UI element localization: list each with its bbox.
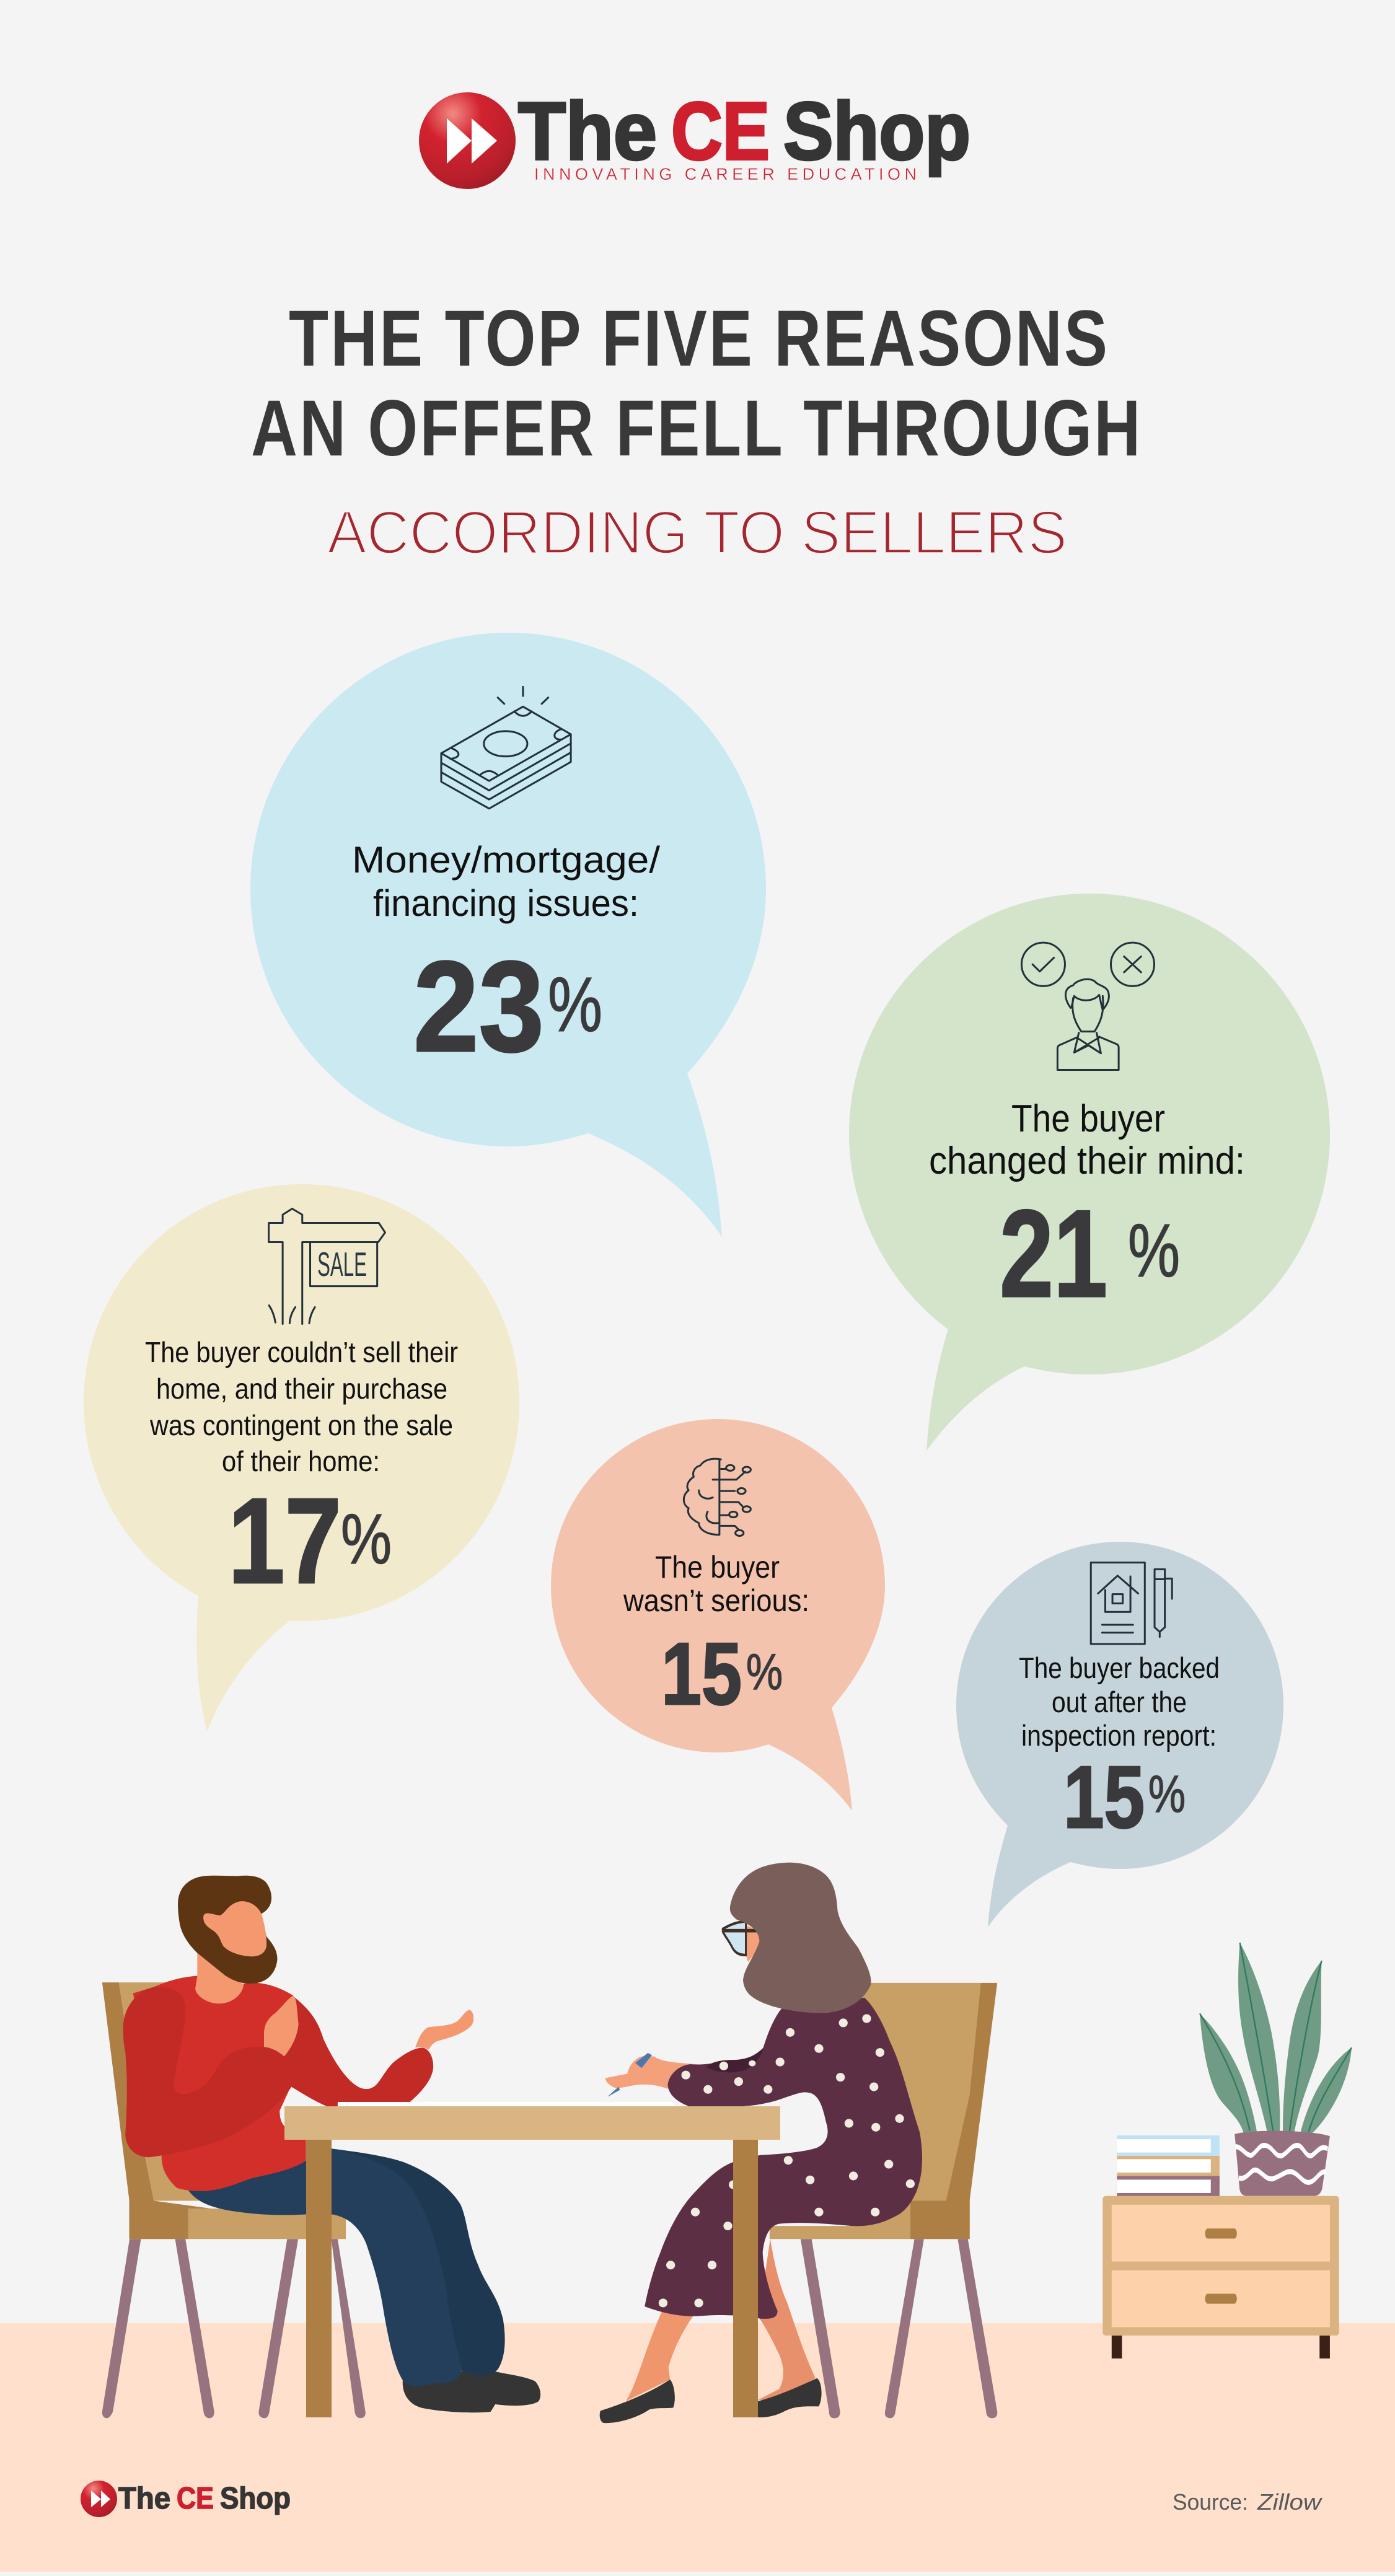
value 15%: % bbox=[1148, 1765, 1186, 1823]
man trousers bbox=[188, 2148, 505, 2386]
label: Money/mortgage/ bbox=[352, 839, 660, 881]
bubble shape bbox=[551, 1419, 885, 1811]
paper on table bbox=[338, 2102, 674, 2107]
woman legs bbox=[626, 2239, 816, 2401]
icon: stack of money bbox=[441, 687, 571, 809]
woman dress bbox=[645, 1998, 922, 2319]
icon: brain circuit bbox=[684, 1459, 750, 1536]
value 17%: 17 bbox=[228, 1473, 341, 1609]
chair left bbox=[102, 1982, 366, 2418]
man hair and beard bbox=[178, 1876, 277, 1984]
plant pot bbox=[1234, 2131, 1330, 2196]
label: of their home: bbox=[222, 1445, 380, 1477]
panel: money issues bubble bbox=[250, 633, 766, 1237]
label: home, and their purchase bbox=[156, 1373, 447, 1405]
label: inspection report: bbox=[1021, 1719, 1217, 1752]
icon: for sale sign bbox=[269, 1209, 385, 1324]
label: wasn’t serious: bbox=[623, 1583, 809, 1618]
footer logo wordmark: CE bbox=[177, 2482, 214, 2515]
panel: contingent sale bubble bbox=[84, 1184, 519, 1732]
woman face and glasses bbox=[723, 1922, 760, 1962]
bubble shape bbox=[250, 633, 766, 1237]
icon: inspection document and pen bbox=[1091, 1563, 1172, 1644]
label bbox=[1019, 1651, 1220, 1752]
footer logo wordmark: Shop bbox=[220, 2482, 291, 2515]
panel: changed mind bubble bbox=[849, 894, 1330, 1451]
footer logo wordmark: The bbox=[118, 2482, 170, 2515]
logo tagline: INNOVATING CAREER EDUCATION bbox=[534, 165, 917, 183]
title: THE TOP FIVE REASONS bbox=[289, 294, 1107, 382]
value 15%: 15 bbox=[1063, 1748, 1145, 1847]
woman seated on chair bbox=[600, 1863, 997, 2423]
footer logo bbox=[81, 2481, 291, 2517]
label: financing issues: bbox=[373, 882, 639, 924]
label bbox=[352, 839, 660, 924]
table bbox=[284, 2102, 780, 2417]
plant leaves bbox=[1200, 1943, 1352, 2133]
logo badge bbox=[419, 92, 516, 189]
woman dress shadow bbox=[706, 2049, 764, 2072]
panel: inspection bubble bbox=[956, 1542, 1283, 1927]
man near arm bbox=[123, 1987, 291, 2157]
logo wordmark: Shop bbox=[783, 86, 970, 177]
table legs bbox=[306, 2140, 758, 2417]
value 15%: 15 bbox=[661, 1625, 742, 1723]
label bbox=[929, 1097, 1245, 1182]
woman hair bbox=[730, 1863, 871, 2013]
logo wordmark: The bbox=[518, 86, 657, 177]
logo wordmark: CE bbox=[671, 86, 770, 177]
woman hand and pen bbox=[605, 2053, 706, 2097]
bubble shape bbox=[84, 1184, 519, 1732]
man torso bbox=[133, 1976, 306, 2191]
label: out after the bbox=[1052, 1686, 1187, 1718]
value 15%: % bbox=[746, 1644, 783, 1700]
footer logo badge bbox=[81, 2481, 117, 2517]
label: changed their mind: bbox=[929, 1140, 1245, 1182]
value 23%: % bbox=[548, 962, 602, 1048]
bubble shape bbox=[956, 1542, 1283, 1927]
floor bbox=[0, 2323, 1395, 2572]
source note: Zillow bbox=[1257, 2489, 1322, 2515]
man face bbox=[203, 1901, 266, 1956]
man far shoe and near shoe bbox=[403, 2372, 540, 2412]
value 17%: % bbox=[341, 1500, 392, 1579]
icon: person deciding bbox=[1021, 943, 1155, 1070]
label: The buyer couldn’t sell their bbox=[145, 1336, 458, 1368]
man far hand bbox=[415, 2010, 473, 2050]
man seated on chair bbox=[102, 1976, 540, 2418]
cabinet bbox=[1102, 2196, 1339, 2358]
label bbox=[623, 1550, 809, 1618]
pot, books and drawer cabinet bbox=[1102, 2131, 1339, 2358]
title: AN OFFER FELL THROUGH bbox=[251, 384, 1140, 472]
woman shoes bbox=[600, 2378, 822, 2423]
label bbox=[145, 1336, 458, 1477]
dress polka dots bbox=[659, 2014, 915, 2307]
label: The buyer backed bbox=[1019, 1651, 1220, 1684]
bubble shape bbox=[849, 894, 1330, 1451]
label: The buyer bbox=[655, 1550, 780, 1585]
man far arm bbox=[283, 1998, 433, 2106]
man neck bbox=[195, 1953, 244, 2003]
table top bbox=[284, 2106, 780, 2140]
subtitle: ACCORDING TO SELLERS bbox=[327, 498, 1067, 566]
value 21%: 21 bbox=[1000, 1185, 1107, 1323]
value 23%: 23 bbox=[413, 935, 544, 1079]
label: The buyer bbox=[1011, 1097, 1165, 1140]
icon text: SALE: SALE bbox=[317, 1245, 367, 1283]
chair right bbox=[770, 1983, 997, 2418]
title bbox=[251, 294, 1140, 472]
man head bbox=[178, 1876, 277, 2003]
value 21%: % bbox=[1128, 1208, 1180, 1293]
source note bbox=[1173, 2489, 1322, 2515]
top logo bbox=[419, 86, 970, 189]
books bbox=[1117, 2135, 1220, 2196]
man near hand bbox=[264, 1995, 299, 2056]
panel: not serious bubble bbox=[551, 1419, 885, 1811]
label: was contingent on the sale bbox=[149, 1409, 453, 1441]
source note: Source: bbox=[1173, 2489, 1248, 2515]
